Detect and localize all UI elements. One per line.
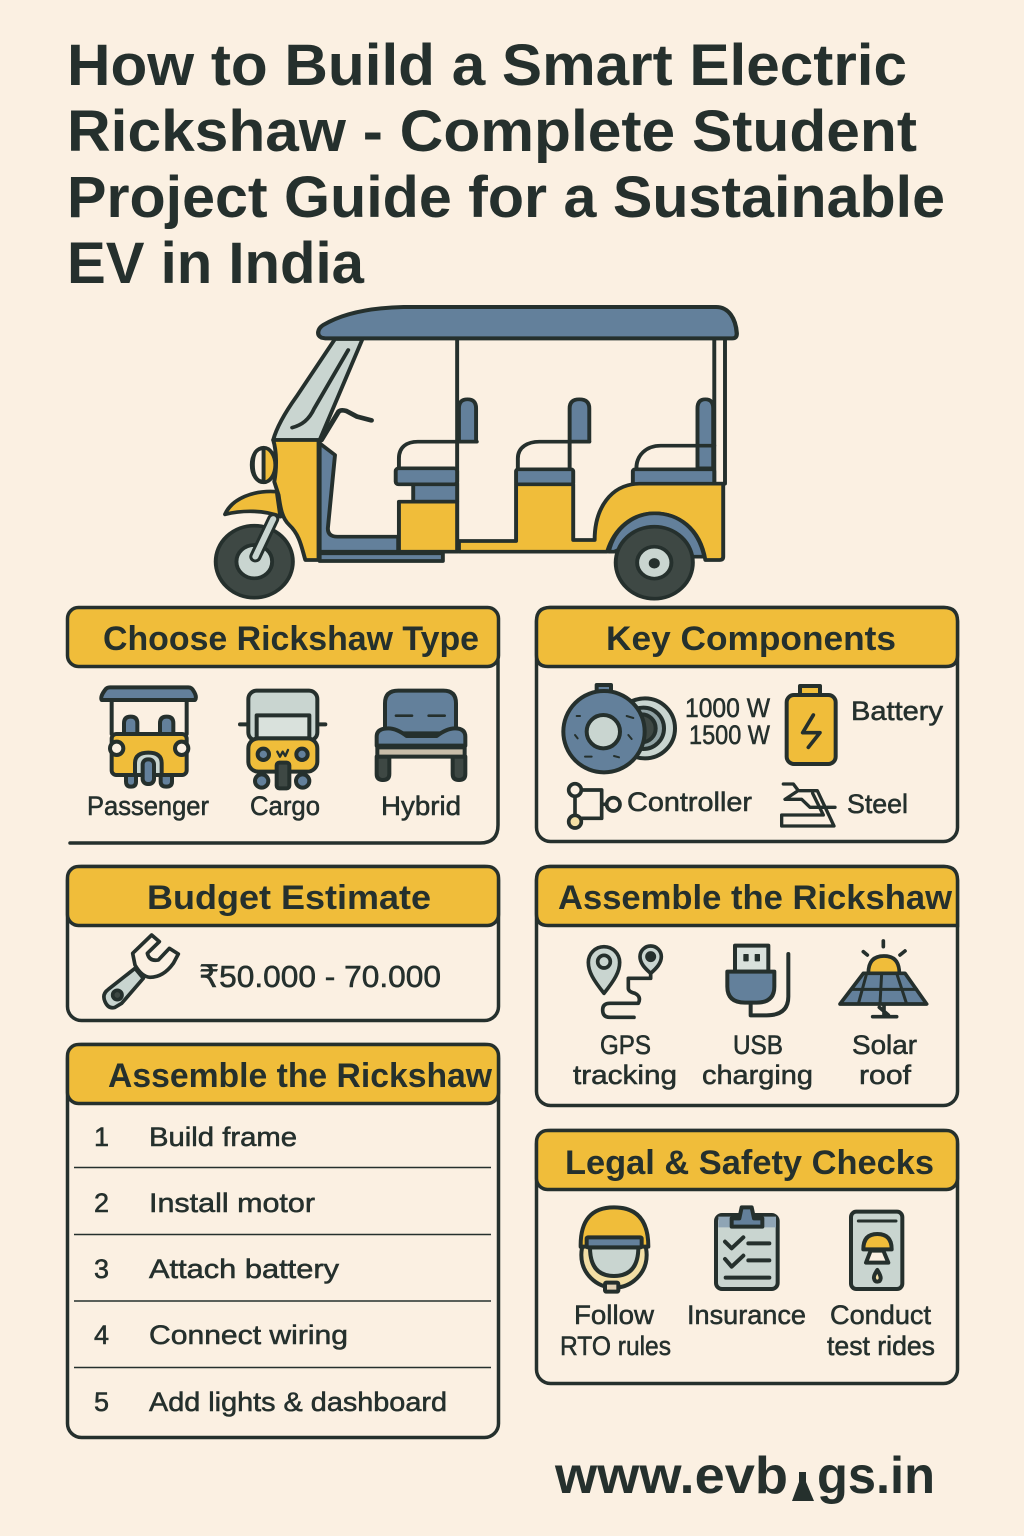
panel: assemble the rickshaw (features): [536, 866, 958, 1106]
step 4: Connect wiring: [149, 1320, 348, 1350]
title: [67, 33, 945, 296]
heading: choose rickshaw type: [68, 608, 498, 666]
website url: gs.in: [817, 1447, 935, 1505]
label: conduct test rides: test rides: [827, 1331, 935, 1361]
heading: key components: [536, 608, 958, 666]
label: battery: Battery: [851, 696, 944, 726]
label: steel: Steel: [847, 789, 908, 819]
heading: budget estimate: Budget Estimate: [147, 879, 431, 917]
website url: [554, 1447, 935, 1505]
step 3: Attach battery: [149, 1254, 340, 1284]
panel: choose rickshaw type: [68, 608, 498, 843]
title: Project Guide for a Sustainable: [67, 165, 945, 230]
panel: budget estimate: [68, 866, 498, 1020]
label: hybrid: Hybrid: [381, 791, 461, 821]
label: conduct test rides: Conduct: [830, 1300, 931, 1330]
icon: motor: [563, 685, 675, 772]
label: follow rto rules: RTO rules: [560, 1331, 671, 1361]
heading: assemble the rickshaw: [536, 866, 958, 926]
panel: assemble the rickshaw (steps): [68, 1044, 498, 1438]
heading: assemble the rickshaw: Assemble the Rickshaw: [108, 1057, 493, 1095]
label: motor power: 1000 W: [685, 693, 770, 723]
icon: cargo rickshaw: [240, 691, 325, 788]
label: solar roof: roof: [859, 1060, 912, 1090]
heading: budget estimate: [68, 866, 498, 926]
label: motor power: [685, 693, 770, 750]
icon: gps: [588, 946, 661, 1017]
label: usb charging: charging: [702, 1060, 813, 1090]
label: conduct test rides: [827, 1300, 935, 1361]
step 2: 2: [94, 1188, 109, 1218]
step 2: [94, 1188, 315, 1218]
illustration: electric rickshaw: [216, 307, 737, 599]
icon: steel: [782, 784, 835, 826]
icon: battery: [787, 686, 836, 764]
label: solar roof: [852, 1030, 917, 1090]
title: EV in India: [67, 231, 365, 296]
step 1: [94, 1122, 297, 1152]
label: insurance: Insurance: [687, 1300, 806, 1330]
panel: legal and safety checks: [536, 1130, 958, 1384]
step 2: Install motor: [149, 1188, 315, 1218]
label: follow rto rules: [560, 1300, 671, 1361]
label: gps tracking: GPS: [600, 1030, 651, 1060]
panel: key components: [536, 608, 958, 842]
label: controller: Controller: [627, 787, 752, 817]
step 3: 3: [94, 1254, 109, 1284]
icon: controller: [569, 784, 620, 828]
step 5: Add lights & dashboard: [149, 1387, 447, 1417]
label: usb charging: [702, 1030, 813, 1090]
heading: choose rickshaw type: Choose Rickshaw Type: [103, 620, 479, 658]
icon: helmet: [581, 1207, 648, 1292]
title: Rickshaw - Complete Student: [67, 99, 917, 164]
heading: assemble the rickshaw: [68, 1044, 498, 1104]
label: motor power: 1500 W: [689, 720, 770, 750]
icon: solar roof: [840, 941, 927, 1017]
heading: key components: Key Components: [606, 620, 896, 658]
label: gps tracking: [573, 1030, 677, 1090]
icon: wrench: [104, 935, 178, 1008]
title: How to Build a Smart Electric: [67, 33, 907, 98]
label: passenger: Passenger: [87, 791, 209, 821]
icon: insurance clipboard: [716, 1207, 778, 1289]
step 3: [94, 1254, 340, 1284]
icon: passenger rickshaw: [101, 687, 196, 787]
budget range: ₹50.000 - 70.000: [199, 959, 441, 994]
heading: legal and safety checks: [536, 1130, 958, 1190]
step 1: 1: [94, 1122, 109, 1152]
heading: legal and safety checks: Legal & Safety Checks: [565, 1144, 934, 1182]
step 1: Build frame: [149, 1122, 297, 1152]
icon: hybrid seat: [377, 691, 465, 780]
step 4: 4: [94, 1320, 109, 1350]
heading: assemble the rickshaw: Assemble the Rickshaw: [558, 879, 953, 917]
step 5: 5: [94, 1387, 109, 1417]
label: usb charging: USB: [733, 1030, 783, 1060]
icon: test ride phone: [851, 1212, 902, 1289]
website url: www.evb: [554, 1447, 788, 1505]
icon: usb: [727, 946, 788, 1015]
label: cargo: Cargo: [250, 791, 320, 821]
label: follow rto rules: Follow: [574, 1300, 655, 1330]
label: gps tracking: tracking: [573, 1060, 677, 1090]
label: solar roof: Solar: [852, 1030, 917, 1060]
